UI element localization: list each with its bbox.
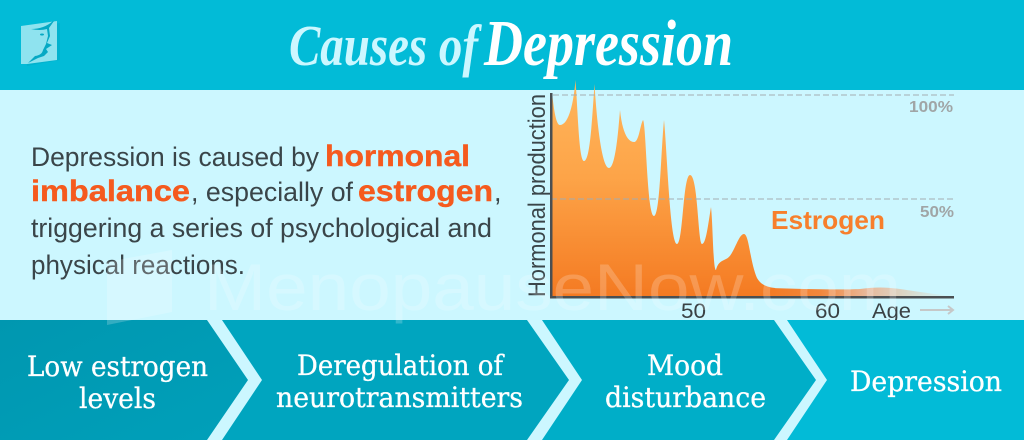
step: deregulation of neurotransmitters: Deregulation of bbox=[297, 349, 505, 382]
step: depression: Depression bbox=[850, 365, 1002, 398]
estrogen area bbox=[552, 80, 780, 297]
flow band: step 4 bbox=[780, 320, 1024, 440]
tick 50: 50 bbox=[681, 300, 706, 323]
y axis bbox=[550, 93, 552, 298]
step: mood disturbance: Mood bbox=[647, 349, 723, 382]
flow band: step 1 bbox=[0, 320, 250, 440]
icon: logo bbox=[21, 21, 60, 66]
intro text block: physical reactions. bbox=[31, 250, 245, 280]
step: low estrogen levels bbox=[27, 350, 208, 415]
title: Causes of bbox=[289, 13, 483, 78]
intro text block: , especially of bbox=[191, 177, 353, 207]
intro text block: hormonal bbox=[325, 140, 470, 173]
flow band: step 3 bbox=[530, 320, 818, 440]
intro text block bbox=[31, 140, 502, 280]
tick 60: 60 bbox=[815, 300, 840, 323]
chevron 1 bbox=[207, 320, 262, 440]
step: low estrogen levels: levels bbox=[79, 382, 156, 415]
arrow bbox=[920, 306, 953, 314]
step: mood disturbance bbox=[605, 349, 766, 414]
background panel bbox=[0, 90, 1024, 320]
watermark: MenopauseNow.com bbox=[204, 250, 901, 324]
step: mood disturbance: disturbance bbox=[605, 381, 766, 414]
step: deregulation of neurotransmitters bbox=[276, 349, 523, 414]
label age: Age bbox=[872, 300, 911, 323]
header band bbox=[0, 0, 1024, 90]
chevron 2 bbox=[527, 320, 582, 440]
step: deregulation of neurotransmitters: neurotransmitters bbox=[276, 381, 523, 414]
intro text block: imbalance bbox=[31, 175, 190, 208]
chevron 3 bbox=[774, 320, 827, 440]
step: low estrogen levels: Low estrogen bbox=[27, 350, 208, 383]
intro text block: , bbox=[494, 177, 502, 207]
chart: estrogen production by age bbox=[524, 80, 954, 323]
label 100 percent: 100% bbox=[909, 99, 953, 116]
label 50 percent: 50% bbox=[920, 204, 954, 221]
flow band: step 2 bbox=[210, 320, 571, 440]
title: Depression bbox=[483, 7, 733, 80]
label estrogen: Estrogen bbox=[771, 205, 885, 235]
y axis label: Hormonal production bbox=[524, 94, 551, 297]
dashed line 50 percent bbox=[551, 198, 954, 200]
estrogen tail fading out bbox=[770, 288, 954, 297]
intro text block: triggering a series of psychological and bbox=[31, 213, 492, 243]
dashed line 100 percent bbox=[553, 94, 954, 96]
eye bbox=[40, 34, 44, 36]
x axis bbox=[550, 296, 954, 298]
intro text block: estrogen bbox=[358, 175, 493, 208]
title bbox=[289, 7, 733, 80]
intro text block: Depression is caused by bbox=[31, 142, 319, 172]
